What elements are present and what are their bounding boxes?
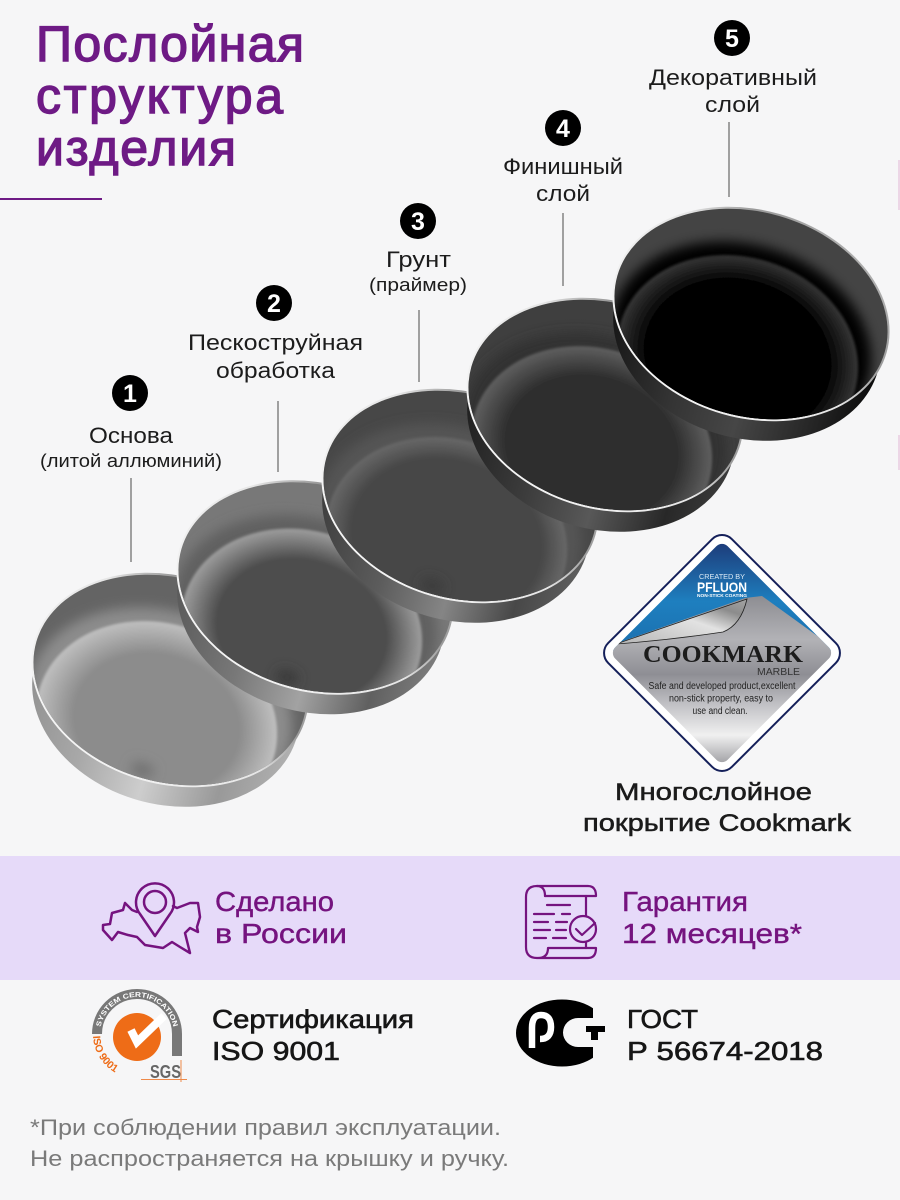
cookmark badge: Safe and developed product,excellent xyxy=(648,681,796,692)
pan layer 2 xyxy=(176,480,452,714)
iso text xyxy=(212,1004,414,1066)
icon: russia map with pin xyxy=(103,883,200,953)
layer 3 label: (праймер) xyxy=(369,274,467,295)
layer 4 label xyxy=(503,110,623,286)
badge caption: Многослойное xyxy=(615,779,812,806)
layer 2 label xyxy=(188,285,363,472)
badge caption xyxy=(583,779,852,837)
pan layer 3 xyxy=(322,388,597,623)
pan layer 1 xyxy=(32,572,307,807)
cookmark badge: COOKMARK xyxy=(643,642,803,668)
pan layer 5 xyxy=(612,206,890,441)
cookmark badge: use and clean. xyxy=(692,706,748,717)
gost text: Р 56674-2018 xyxy=(627,1036,823,1066)
layer 5 label: Декоративный xyxy=(649,65,817,90)
layer 5 label: слой xyxy=(705,92,760,117)
iso text: ISO 9001 xyxy=(212,1036,340,1066)
made in russia text xyxy=(215,886,347,949)
warranty text xyxy=(622,886,802,949)
title: изделия xyxy=(36,120,236,176)
layer 1 label: Основа xyxy=(89,423,174,448)
cookmark badge: non-stick property, easy to xyxy=(669,694,773,704)
iso text: Сертификация xyxy=(212,1004,414,1034)
layer 4 label: слой xyxy=(536,181,590,206)
layer 3 label xyxy=(369,203,467,382)
layer 5 label: 5 xyxy=(725,25,739,53)
icon: iso 9001 sgs logo: SGS xyxy=(150,1062,181,1082)
layer 1 label xyxy=(40,375,222,562)
footnote: Не распространяется на крышку и ручку. xyxy=(30,1146,509,1171)
layer 2 label: обработка xyxy=(216,358,336,383)
title: Послойная xyxy=(36,16,304,72)
icon: rst gost logo xyxy=(516,1000,608,1066)
title underline xyxy=(0,198,102,200)
warranty text: 12 месяцев* xyxy=(622,918,802,949)
layer 3 label: 3 xyxy=(411,208,425,236)
layer 2 label: Пескоструйная xyxy=(188,330,363,355)
cookmark badge: PFLUON xyxy=(697,579,747,595)
footnote xyxy=(30,1115,509,1171)
layer 4 label: 4 xyxy=(556,115,570,143)
layer 3 label: Грунт xyxy=(386,247,451,272)
layer 1 label: (литой аллюминий) xyxy=(40,450,222,471)
title: структура xyxy=(36,68,283,124)
cookmark badge: MARBLE xyxy=(757,666,800,678)
footnote: *При соблюдении правил эксплуатации. xyxy=(30,1115,501,1140)
title xyxy=(36,16,304,176)
cookmark badge: CREATED BY xyxy=(699,574,745,581)
pan layer 4 xyxy=(466,298,742,532)
gost text xyxy=(627,1004,823,1066)
gost text: ГОСТ xyxy=(627,1004,698,1034)
warranty text: Гарантия xyxy=(622,886,748,917)
layer 1 label: 1 xyxy=(123,380,137,408)
icon: iso 9001 sgs logo: ISO 9001 xyxy=(93,1036,118,1072)
icon: warranty scroll xyxy=(526,886,596,958)
lilac band xyxy=(0,856,900,980)
badge caption: покрытие Cookmark xyxy=(583,810,852,837)
made in russia text: Сделано xyxy=(215,886,334,917)
icon: iso 9001 sgs logo xyxy=(92,989,187,1082)
layer 4 label: Финишный xyxy=(503,154,623,179)
icon: iso 9001 sgs logo: SYSTEM CERTIFICATION xyxy=(96,992,178,1026)
cookmark badge xyxy=(598,529,846,777)
layer 2 label: 2 xyxy=(267,290,281,318)
cookmark badge: NON-STICK COATING xyxy=(697,593,748,598)
layer 5 label xyxy=(649,20,817,197)
made in russia text: в России xyxy=(215,918,347,949)
